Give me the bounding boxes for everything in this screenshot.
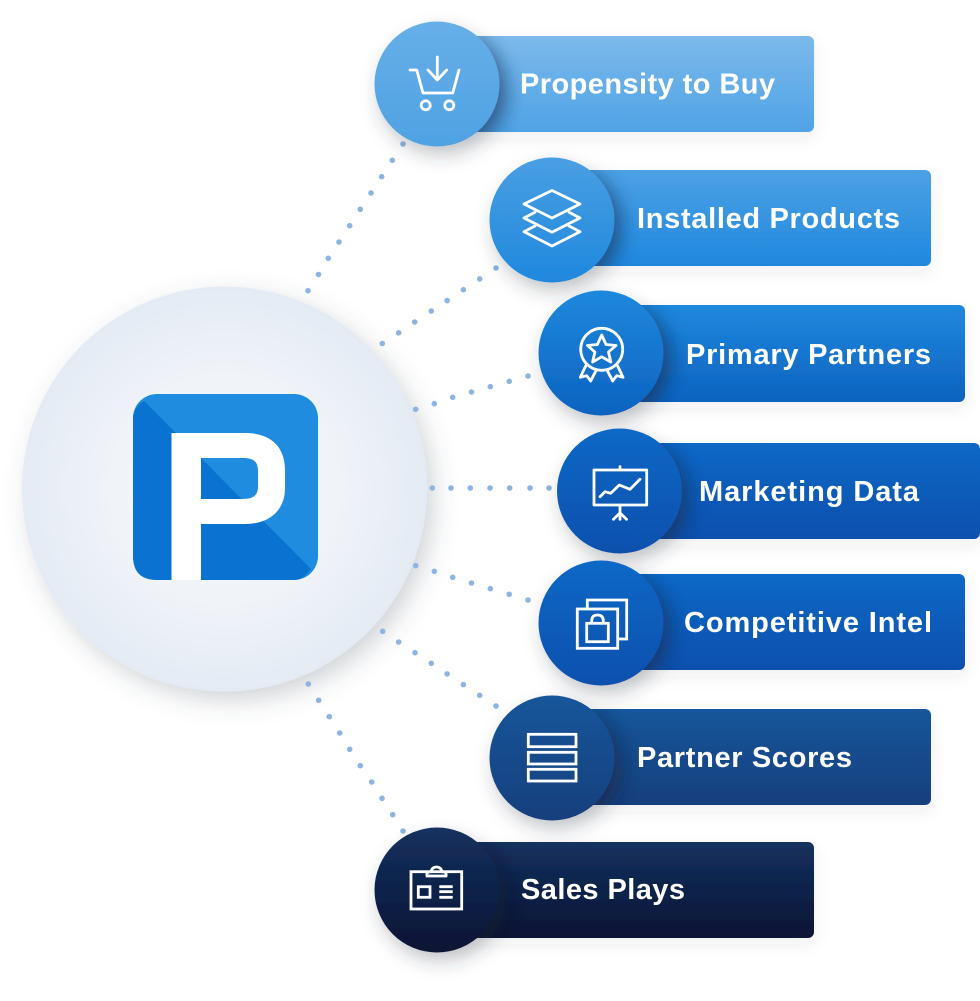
item: Primary Partners: [538, 290, 965, 422]
item: Sales Plays: Sales Plays: [521, 874, 685, 906]
icon: clipboard card: [411, 867, 462, 909]
item: Installed Products: Installed Products: [637, 203, 900, 235]
item: Partner Scores: Partner Scores: [637, 742, 852, 774]
item: Installed Products: [490, 158, 931, 289]
item: Sales Plays: [374, 828, 814, 959]
item: Primary Partners: Primary Partners: [686, 339, 931, 371]
item: Partner Scores: [490, 696, 931, 827]
icon: award badge: [580, 328, 623, 381]
item: Marketing Data: Marketing Data: [699, 476, 920, 508]
item: Competitive Intel: Competitive Intel: [684, 607, 932, 639]
item: Propensity to Buy: [374, 22, 814, 153]
icon: shopping cart: [410, 57, 459, 110]
item: Propensity to Buy: Propensity to Buy: [520, 68, 775, 100]
icon: layers: [524, 190, 580, 246]
dotted connectors: [305, 141, 552, 834]
central circle: [22, 286, 427, 692]
icon: locked documents: [577, 600, 627, 648]
logo: P mark: [133, 394, 318, 580]
item: Marketing Data: [557, 428, 980, 560]
item: Competitive Intel: [538, 560, 965, 692]
icon: presentation chart: [594, 467, 647, 519]
icon: stacked rows: [528, 734, 576, 781]
